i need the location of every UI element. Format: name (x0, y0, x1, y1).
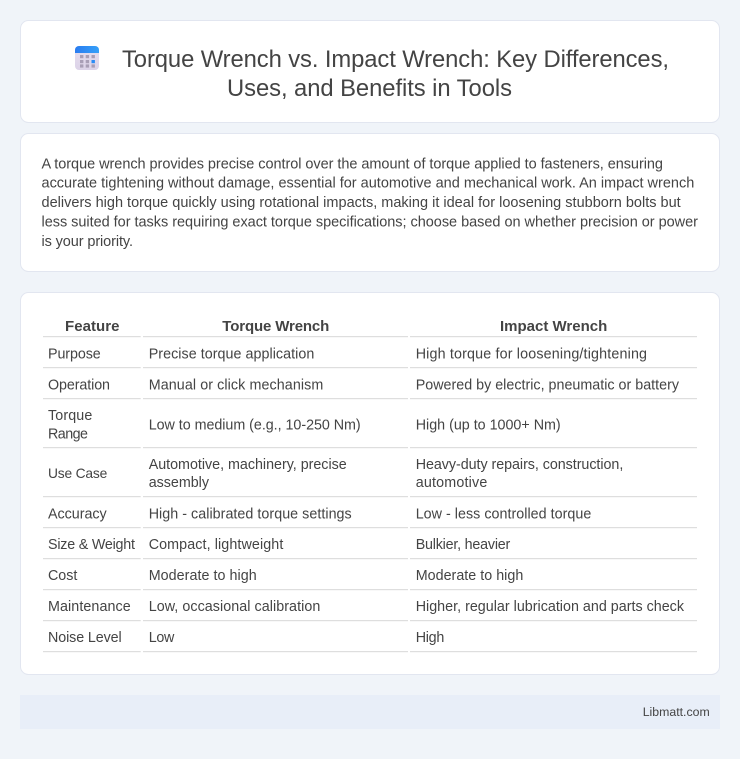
row: maintenance: Low, occasional calibration (149, 599, 320, 615)
row: accuracy (48, 506, 591, 522)
summary text: less suited for tasks requiring exact torque specifications; choose based on whether precision or power (42, 214, 698, 230)
row: torque range: Low to medium (e.g., 10-250 Nm) (149, 417, 361, 433)
summary text (42, 156, 698, 250)
row: operation: Powered by electric, pneumatic or battery (416, 377, 680, 393)
panel: header (20, 20, 720, 122)
row: noise level: Noise Level (48, 630, 122, 646)
row: operation (48, 377, 680, 393)
row: operation: Operation (48, 377, 110, 393)
footer (20, 695, 720, 729)
row: size and weight: Bulkier, heavier (416, 537, 511, 553)
table row lines (43, 336, 697, 652)
summary text: A torque wrench provides precise control over the amount of torque applied to fasteners, ensuring (42, 156, 663, 172)
row: use case (48, 457, 623, 491)
row: cost: Cost (48, 568, 77, 584)
row: torque range (48, 408, 561, 442)
row: size and weight: Compact, lightweight (149, 537, 283, 553)
title: Torque Wrench vs. Impact Wrench: Key Differences, (122, 46, 669, 73)
row: torque range: Torque (48, 408, 92, 424)
summary text: delivers high torque quickly using rotational impacts, making it ideal for loosening stubborn bolts but (42, 195, 681, 211)
row: cost: Moderate to high (416, 568, 523, 584)
row: accuracy: High - calibrated torque settings (149, 506, 352, 522)
table header: Torque Wrench (222, 318, 329, 335)
row: maintenance (48, 599, 685, 615)
row: size and weight: Size & Weight (48, 537, 135, 553)
row: cost (48, 568, 523, 584)
row: purpose (48, 346, 647, 362)
row: torque range: Range (48, 426, 88, 442)
title: Uses, and Benefits in Tools (227, 75, 512, 102)
row: use case: Use Case (48, 466, 108, 481)
row: noise level (48, 630, 444, 646)
panel: comparison table (20, 292, 720, 674)
table header (65, 318, 607, 335)
footer credit: Libmatt.com (643, 705, 710, 719)
table header: Feature (65, 318, 120, 335)
row: use case: Automotive, machinery, precise (149, 457, 347, 473)
icon: calendar (75, 46, 99, 70)
row: use case: assembly (149, 475, 210, 491)
row: accuracy: Low - less controlled torque (416, 506, 591, 522)
row: accuracy: Accuracy (48, 506, 108, 522)
row: maintenance: Maintenance (48, 599, 131, 615)
summary text: accurate tightening without damage, essential for automotive and mechanical work. An impact wrench (42, 176, 694, 192)
row: maintenance: Higher, regular lubrication and parts check (416, 599, 685, 615)
table header: Impact Wrench (500, 318, 607, 335)
row: operation: Manual or click mechanism (149, 377, 323, 393)
title (122, 46, 669, 102)
row: noise level: Low (149, 630, 175, 646)
row: torque range: High (up to 1000+ Nm) (416, 417, 561, 433)
row: use case: automotive (416, 475, 487, 491)
panel: summary (20, 134, 720, 272)
row: cost: Moderate to high (149, 568, 257, 584)
row: purpose: Purpose (48, 346, 101, 362)
row: use case: Heavy-duty repairs, construction, (416, 457, 623, 473)
row: noise level: High (416, 630, 444, 646)
row: purpose: High torque for loosening/tightening (416, 346, 647, 362)
row: purpose: Precise torque application (149, 346, 314, 362)
row: size and weight (48, 537, 511, 553)
summary text: is your priority. (42, 234, 133, 250)
